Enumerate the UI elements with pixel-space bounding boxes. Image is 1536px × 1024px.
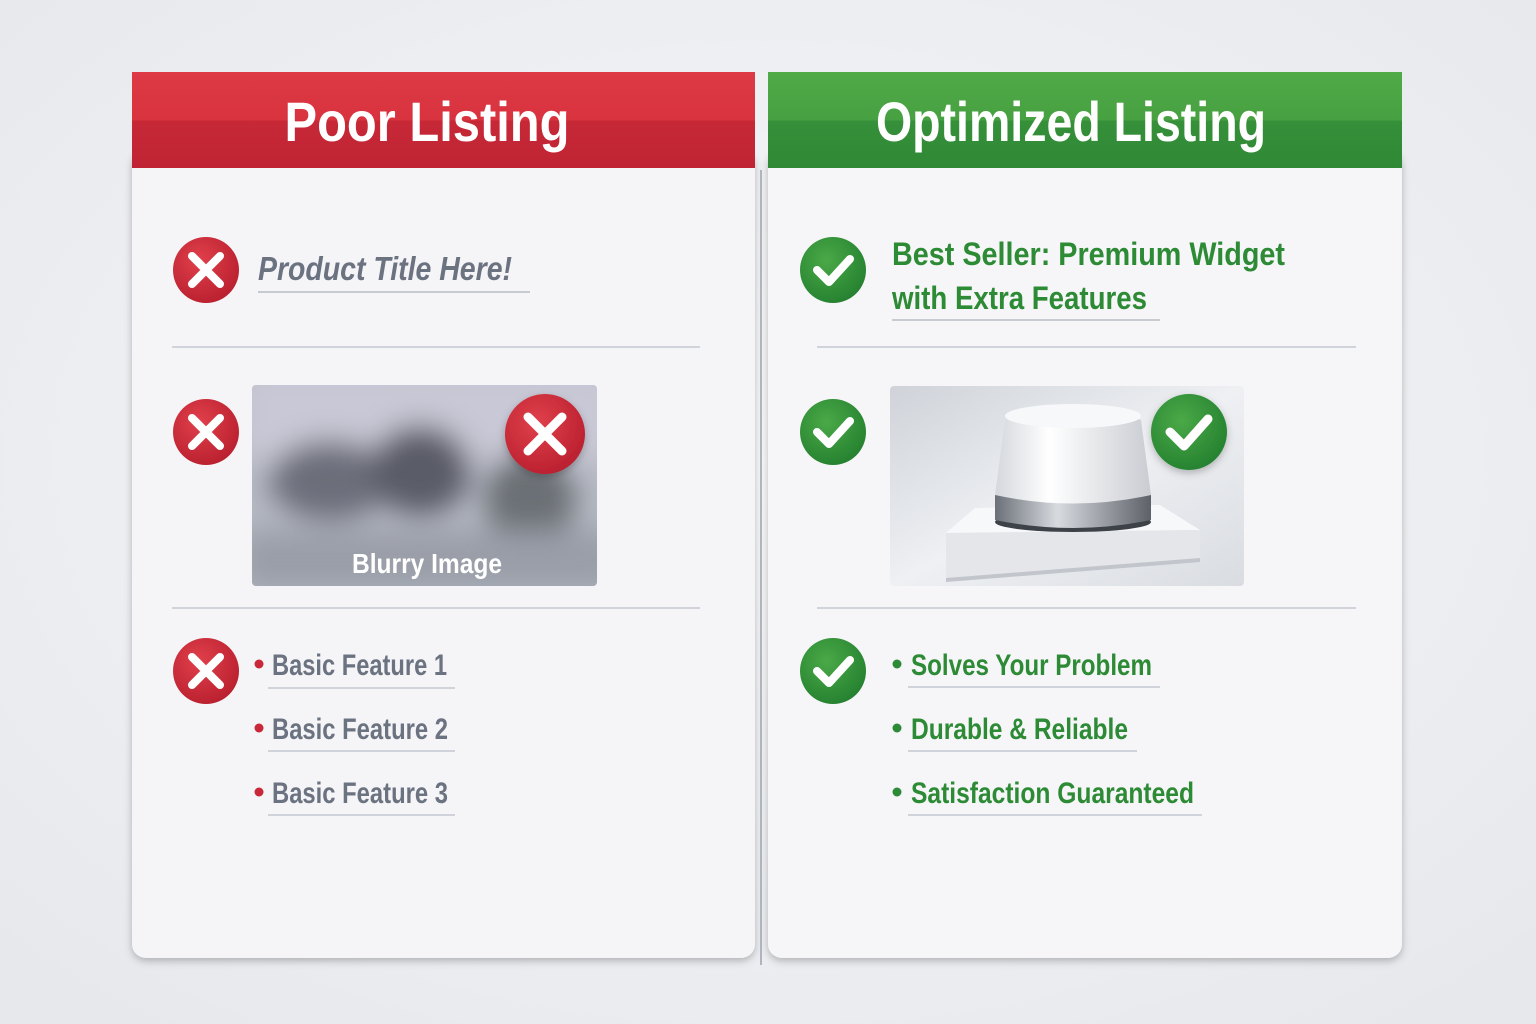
blurry image: Blurry Image: [352, 548, 502, 579]
panel: optimized listing: [768, 72, 1402, 958]
feature list: benefits: [892, 649, 1202, 815]
feature list: basic: [254, 649, 455, 815]
icon: big x: [505, 394, 585, 474]
product image: [890, 386, 1244, 586]
heading: poor listing: Poor Listing: [284, 90, 570, 153]
icon: big check: [1151, 394, 1227, 470]
feature list: benefits: Durable & Reliable: [911, 713, 1128, 746]
icon: check title: [800, 237, 866, 303]
text: optimized title: Best Seller: Premium Widget: [892, 236, 1285, 272]
text: product title: Product Title Here!: [258, 250, 512, 287]
feature list: basic: Basic Feature 2: [272, 713, 448, 746]
text: optimized title: [891, 236, 1285, 320]
icon: x features: [173, 638, 239, 704]
feature list: benefits: Satisfaction Guaranteed: [911, 777, 1194, 810]
text: optimized title: with Extra Features: [891, 280, 1147, 316]
feature list: benefits: Solves Your Problem: [911, 649, 1152, 682]
feature list: basic: Basic Feature 1: [272, 649, 447, 682]
blurry image: [252, 385, 597, 586]
icon: x image: [173, 399, 239, 465]
feature list: basic: Basic Feature 3: [272, 777, 448, 810]
icon: check features: [800, 638, 866, 704]
heading: optimized listing: [768, 72, 1402, 168]
icon: check image: [800, 399, 866, 465]
icon: x title: [173, 237, 239, 303]
panel: poor listing: [132, 72, 755, 958]
heading: poor listing: [132, 72, 755, 168]
heading: optimized listing: Optimized Listing: [876, 90, 1266, 153]
